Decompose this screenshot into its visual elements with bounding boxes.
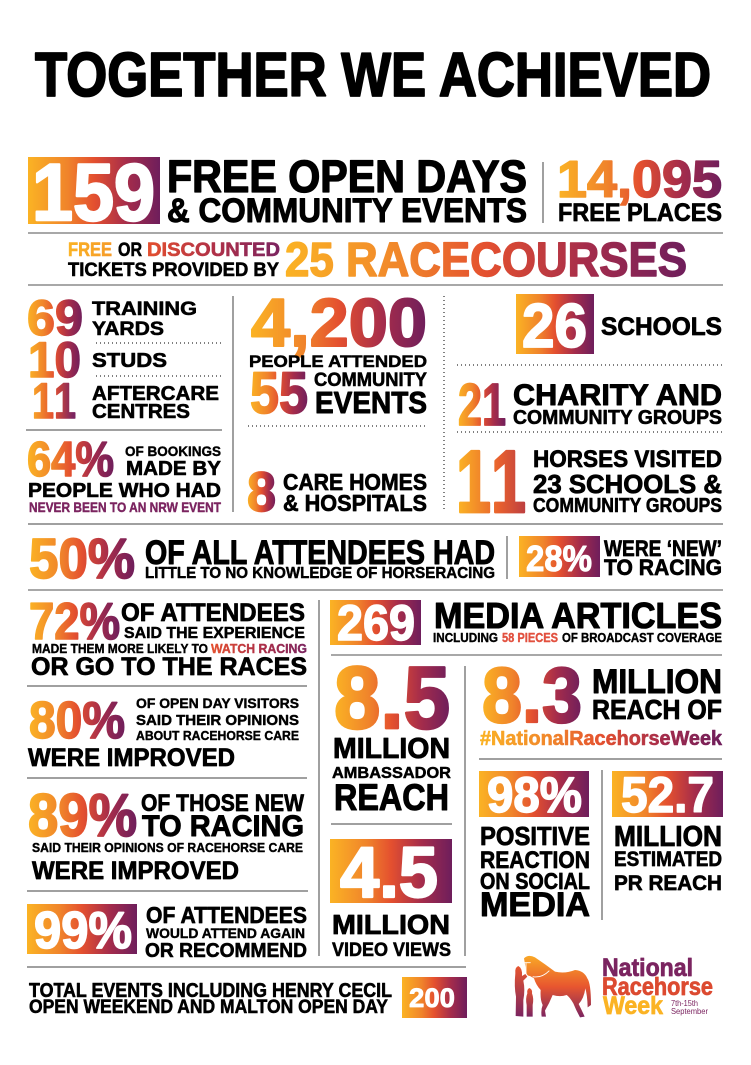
panel: ambassador reach: MILLION — [333, 733, 450, 765]
panel: media articles: OF BROADCAST COVERAGE — [562, 630, 722, 645]
panel: 64 percent of bookings: PEOPLE WHO HAD — [28, 480, 221, 502]
panel: 99 percent would attend again: 99% — [34, 902, 132, 960]
panel: community events: PEOPLE ATTENDED — [249, 352, 427, 371]
panel: 80 percent of visitors: 80% — [29, 692, 125, 750]
logo: National Racehorse Week: Racehorse — [602, 973, 713, 1001]
panel: 72 percent of attendees: OR GO TO THE RACES — [31, 653, 307, 681]
panel: positive reaction on social media: POSITIVE — [480, 821, 590, 851]
panel: video views: MILLION — [332, 909, 450, 940]
panel: media articles: INCLUDING — [433, 630, 498, 645]
panel: community events: 55 — [250, 361, 308, 426]
panel: 72 percent of attendees: 72% — [29, 593, 120, 651]
panel: positive reaction on social media: REACTION — [480, 847, 590, 874]
panel: video views — [330, 834, 452, 961]
panel: 99 percent would attend again: OR RECOMMEND — [145, 940, 307, 962]
panel: free open days: FREE PLACES — [558, 199, 722, 227]
logo: National Racehorse Week: September — [671, 1007, 708, 1016]
panel: 99 percent would attend again: WOULD ATTEND AGAIN — [146, 925, 305, 941]
panel: media articles — [330, 595, 722, 651]
panel: free open days: FREE OPEN DAYS — [167, 151, 527, 202]
panel: 89 percent new to racing: TO RACING — [142, 810, 304, 843]
panel: training yards, studs and aftercare — [27, 290, 222, 429]
panel: free open days: 14,095 — [557, 151, 722, 209]
panel: 99 percent would attend again: OF ATTENDEES — [146, 902, 307, 928]
panel: care homes and hospitals: 8 — [247, 460, 276, 523]
panel: positive reaction on social media: MEDIA — [480, 886, 590, 924]
panel: 89 percent new to racing: SAID THEIR OPINIONS OF RACEHORSE CARE — [32, 840, 303, 855]
panel: 89 percent new to racing: WERE IMPROVED — [32, 857, 239, 885]
panel: horses visited: 1 — [456, 432, 491, 531]
panel: training yards, studs and aftercare: 1 — [32, 373, 54, 429]
panel: positive reaction on social media — [479, 767, 590, 924]
panel: 80 percent of visitors: WERE IMPROVED — [28, 744, 235, 772]
panel: racecourses: DISCOUNTED — [147, 240, 280, 261]
panel: 72 percent of attendees: WATCH RACING — [211, 641, 307, 656]
panel: hashtag reach: REACH OF — [592, 694, 722, 725]
panel: total events: TOTAL EVENTS INCLUDING HENRY CECIL — [29, 980, 392, 1002]
icon: horse with woman and child — [515, 956, 591, 1017]
panel: total events: OPEN WEEKEND AND MALTON OPEN DAY — [29, 997, 388, 1018]
panel: training yards, studs and aftercare: YARDS — [92, 319, 164, 340]
panel: media articles: 269 — [337, 595, 415, 651]
panel: estimated PR reach: PR REACH — [614, 872, 722, 895]
panel: 28 percent new to racing: 28% — [526, 538, 592, 579]
panel: ambassador reach: 8.5 — [334, 648, 450, 747]
panel: 50 percent of attendees: 50% — [29, 527, 135, 591]
panel: 64 percent of bookings: NEVER BEEN TO AN NRW EVENT — [29, 499, 221, 515]
panel: racecourses: 25 RACECOURSES — [285, 234, 687, 287]
panel: training yards, studs and aftercare: TRAINING — [92, 299, 197, 320]
panel: care homes and hospitals — [247, 460, 427, 523]
panel: training yards, studs and aftercare: 10 — [28, 332, 81, 388]
panel: hashtag reach: 8.3 — [482, 651, 582, 739]
panel: media articles: MEDIA ARTICLES — [434, 595, 722, 636]
panel: charity and community groups — [458, 372, 722, 438]
panel: 89 percent new to racing: OF THOSE NEW — [141, 790, 304, 817]
panel: schools: 26 — [522, 292, 587, 361]
panel: total events — [29, 977, 467, 1018]
panel: schools — [516, 292, 722, 361]
panel: free open days: 159 — [32, 148, 155, 238]
panel: 64 percent of bookings — [27, 433, 222, 515]
panel: training yards, studs and aftercare: 69 — [27, 290, 83, 346]
panel: community events — [249, 285, 427, 426]
panel: estimated PR reach: MILLION — [614, 821, 722, 853]
logo: National Racehorse Week: 7th-15th — [671, 999, 698, 1008]
panel: 99 percent would attend again — [27, 902, 307, 962]
panel: video views: VIDEO VIEWS — [332, 940, 451, 961]
panel: 80 percent of visitors: SAID THEIR OPINIONS — [136, 712, 299, 729]
panel: charity and community groups: 21 — [458, 372, 506, 438]
panel: community events: 4,200 — [251, 285, 427, 361]
panel: racecourses — [68, 234, 687, 287]
panel: 64 percent of bookings: OF BOOKINGS — [125, 443, 221, 459]
panel: charity and community groups: COMMUNITY GROUPS — [513, 407, 722, 429]
panel: 28 percent new to racing: WERE ‘NEW’ — [604, 536, 722, 561]
panel: 28 percent new to racing: TO RACING — [604, 555, 722, 580]
panel: 72 percent of attendees: SAID THE EXPERIENCE — [124, 625, 305, 642]
panel: horses visited: 23 SCHOOLS & — [533, 469, 722, 499]
panel: free open days — [28, 148, 722, 238]
panel: training yards, studs and aftercare: STUDS — [92, 350, 167, 372]
panel: racecourses: TICKETS PROVIDED BY — [68, 260, 279, 281]
logo: National Racehorse Week — [515, 954, 713, 1020]
panel: estimated PR reach: 52.7 — [621, 767, 714, 823]
panel: community events: COMMUNITY — [314, 370, 427, 391]
panel: total events: 200 — [409, 983, 455, 1013]
panel: 72 percent of attendees: MADE THEM MORE LIKELY TO — [32, 641, 208, 656]
panel: estimated PR reach: ESTIMATED — [614, 848, 722, 871]
panel: racecourses: FREE — [68, 240, 112, 261]
panel: 64 percent of bookings: MADE BY — [126, 458, 222, 480]
panel: ambassador reach: REACH — [334, 777, 449, 818]
panel: media articles: 58 PIECES — [502, 630, 558, 645]
logo: National Racehorse Week: Week — [603, 992, 663, 1020]
panel: 50 percent of attendees: OF ALL ATTENDEES HAD — [145, 534, 495, 572]
panel: training yards, studs and aftercare: 1 — [54, 373, 76, 429]
panel: 89 percent new to racing: 89% — [28, 782, 137, 849]
panel: 50 percent of attendees — [29, 527, 495, 591]
panel: racecourses: OR — [118, 240, 142, 261]
panel: 89 percent new to racing — [28, 782, 304, 885]
panel: community events: EVENTS — [315, 385, 427, 420]
panel: 50 percent of attendees: LITTLE TO NO KNOWLEDGE OF HORSERACING — [145, 565, 495, 582]
panel: ambassador reach — [332, 648, 451, 818]
panel: 80 percent of visitors: ABOUT RACEHORSE CARE — [136, 728, 299, 743]
panel: 80 percent of visitors: OF OPEN DAY VISITORS — [136, 695, 299, 711]
panel: schools: SCHOOLS — [601, 313, 722, 341]
panel: horses visited: COMMUNITY GROUPS — [533, 495, 722, 517]
panel: care homes and hospitals: & HOSPITALS — [283, 490, 427, 516]
panel: positive reaction on social media: ON SOCIAL — [480, 868, 590, 894]
panel: 72 percent of attendees — [29, 593, 307, 681]
panel: charity and community groups: CHARITY AND — [513, 379, 722, 412]
panel: horses visited: 1 — [491, 432, 526, 531]
panel: ambassador reach: AMBASSADOR — [332, 765, 451, 782]
panel: training yards, studs and aftercare: AFTERCARE — [92, 383, 219, 405]
panel: hashtag reach: #NationalRacehorseWeek — [480, 728, 723, 750]
panel: 80 percent of visitors — [28, 692, 299, 772]
panel: horses visited — [456, 432, 722, 531]
panel: 72 percent of attendees: OF ATTENDEES — [121, 599, 305, 627]
panel: training yards, studs and aftercare: CENTRES — [92, 401, 190, 423]
panel: hashtag reach — [480, 651, 723, 750]
logo: National Racehorse Week: National — [602, 954, 693, 982]
panel: free open days: & COMMUNITY EVENTS — [167, 192, 527, 230]
panel: positive reaction on social media: 98% — [487, 767, 582, 823]
panel: horses visited: HORSES VISITED — [533, 446, 722, 473]
panel: care homes and hospitals: CARE HOMES — [283, 469, 427, 495]
panel: estimated PR reach — [612, 767, 723, 895]
panel: video views: 4.5 — [340, 834, 438, 913]
panel: 28 percent new to racing — [519, 536, 722, 580]
panel: hashtag reach: MILLION — [592, 663, 722, 701]
panel: 64 percent of bookings: 64% — [27, 433, 114, 487]
